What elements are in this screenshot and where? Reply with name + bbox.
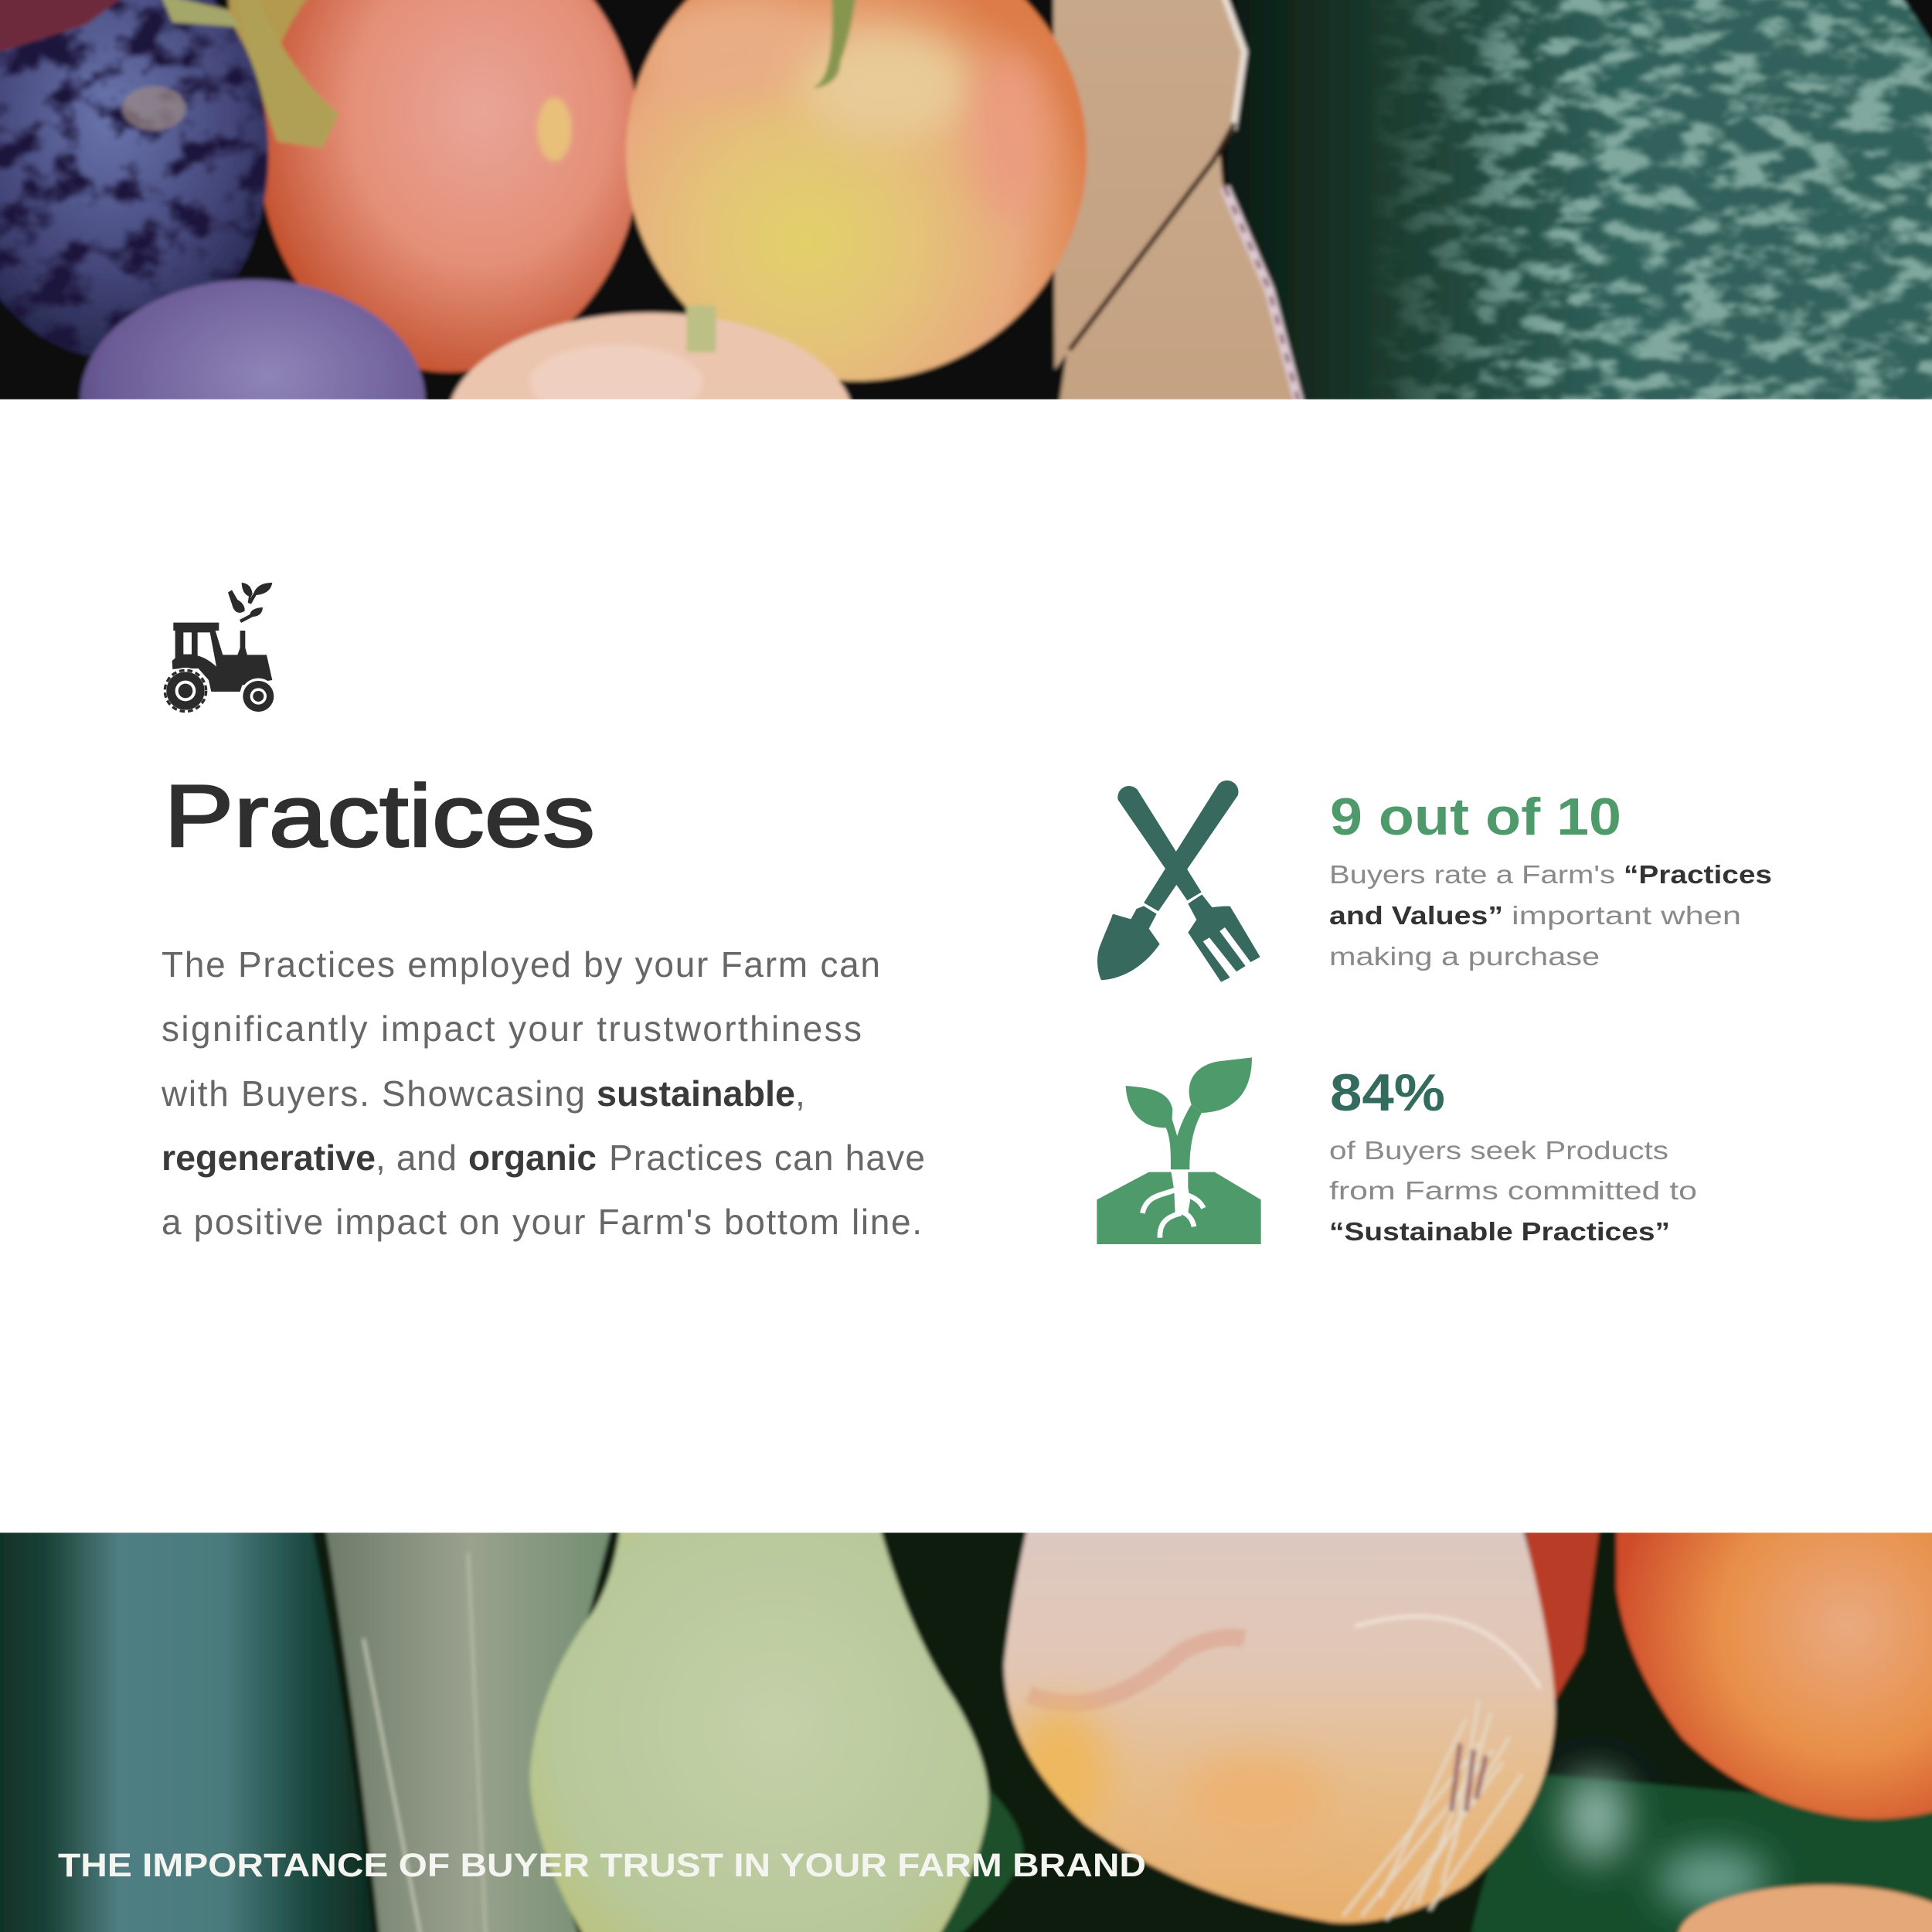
text block: intro paragraph: a positive impact on your Farm's bottom line. bbox=[162, 1202, 922, 1242]
stat: 84%: of Buyers seek Products bbox=[1329, 1136, 1668, 1165]
footer title: THE IMPORTANCE OF BUYER TRUST IN YOUR FARM BRAND bbox=[58, 1847, 1146, 1884]
photo banner: fruit in a crate (top) bbox=[0, 0, 1932, 400]
text block: intro paragraph: , and bbox=[376, 1138, 457, 1178]
icon: crossed trowel and fork bbox=[1097, 781, 1260, 982]
text block: intro paragraph: , bbox=[795, 1073, 805, 1114]
text block: intro paragraph: regenerative bbox=[162, 1138, 376, 1178]
stat: 84%: “Sustainable Practices” bbox=[1329, 1217, 1670, 1246]
text block: intro paragraph: organic bbox=[468, 1138, 597, 1178]
icon: tractor with sprout bbox=[162, 583, 277, 714]
heading: Practices: Practices bbox=[164, 767, 595, 866]
text block: intro paragraph: with Buyers. Showcasing bbox=[161, 1073, 585, 1114]
text block: intro paragraph: significantly impact your trustworthiness bbox=[162, 1009, 862, 1049]
stat: 9 out of 10: and Values” bbox=[1329, 901, 1503, 930]
stat: 84%: from Farms committed to bbox=[1329, 1176, 1697, 1205]
stat: 9 out of 10: important when bbox=[1512, 901, 1741, 930]
stat: 84%: 84% bbox=[1330, 1063, 1445, 1122]
stat: 84% bbox=[1329, 1063, 1697, 1246]
text block: intro paragraph: The Practices employed by your Farm can bbox=[162, 944, 880, 985]
stat: 9 out of 10 bbox=[1329, 787, 1772, 971]
icon: seedling with roots bbox=[1097, 1057, 1261, 1244]
stat: 9 out of 10: making a purchase bbox=[1329, 942, 1600, 971]
stat: 9 out of 10: 9 out of 10 bbox=[1330, 787, 1621, 846]
text block: intro paragraph: Practices can have bbox=[609, 1138, 925, 1178]
text block: intro paragraph: sustainable bbox=[597, 1073, 795, 1114]
text block: intro paragraph bbox=[161, 944, 925, 1242]
stat: 9 out of 10: Buyers rate a Farm's bbox=[1329, 860, 1615, 889]
stat: 9 out of 10: “Practices bbox=[1624, 860, 1772, 889]
photo banner: vegetables (bottom) bbox=[0, 1497, 1932, 1932]
